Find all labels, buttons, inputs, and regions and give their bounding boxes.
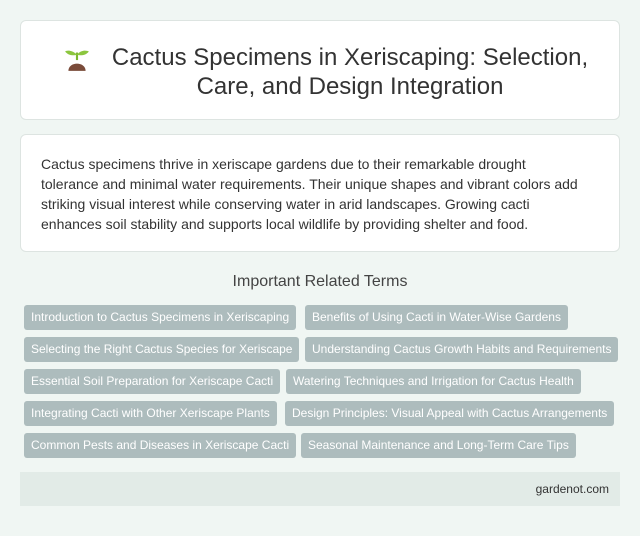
tag row 3 [24, 369, 280, 394]
tag row 1 [24, 305, 296, 330]
footer [20, 472, 620, 506]
tag row 5: Common Pests and Diseases in Xeriscape Cacti [31, 438, 289, 452]
title card [20, 20, 620, 120]
tags: Benefits of Using Cacti in Water-Wise Gardens [312, 310, 561, 324]
tags: Watering Techniques and Irrigation for Cactus Health [293, 374, 574, 388]
tag row 4 [24, 401, 277, 426]
tags: Seasonal Maintenance and Long-Term Care Tips [308, 438, 569, 452]
tag row 1: Introduction to Cactus Specimens in Xeriscaping [31, 310, 289, 324]
description text: striking visual interest while conserving water in arid landscapes. Growing cacti [41, 196, 530, 212]
tag row 2 [24, 337, 299, 362]
tag row 4: Integrating Cacti with Other Xeriscape Plants [31, 406, 270, 420]
description text [41, 156, 578, 232]
description card [20, 134, 620, 252]
description text: tolerance and minimal water requirements. Their unique shapes and vibrant colors add [41, 176, 578, 192]
description text: Cactus specimens thrive in xeriscape gardens due to their remarkable drought [41, 156, 526, 172]
heading: related terms: Important Related Terms [233, 273, 407, 290]
tags: Design Principles: Visual Appeal with Cactus Arrangements [292, 406, 607, 420]
title: Cactus Specimens in Xeriscaping: Selection, Care, and Design Integration [112, 44, 588, 100]
tag row 2: Selecting the Right Cactus Species for Xeriscape [31, 342, 292, 356]
icon: sprout [65, 50, 89, 71]
description text: enhances soil stability and supports local wildlife by providing shelter and food. [41, 216, 528, 232]
tags: Understanding Cactus Growth Habits and Requirements [312, 342, 611, 356]
footer: gardenot.com [536, 482, 609, 496]
tag row 3: Essential Soil Preparation for Xeriscape Cacti [31, 374, 273, 388]
tag row 5 [24, 433, 296, 458]
